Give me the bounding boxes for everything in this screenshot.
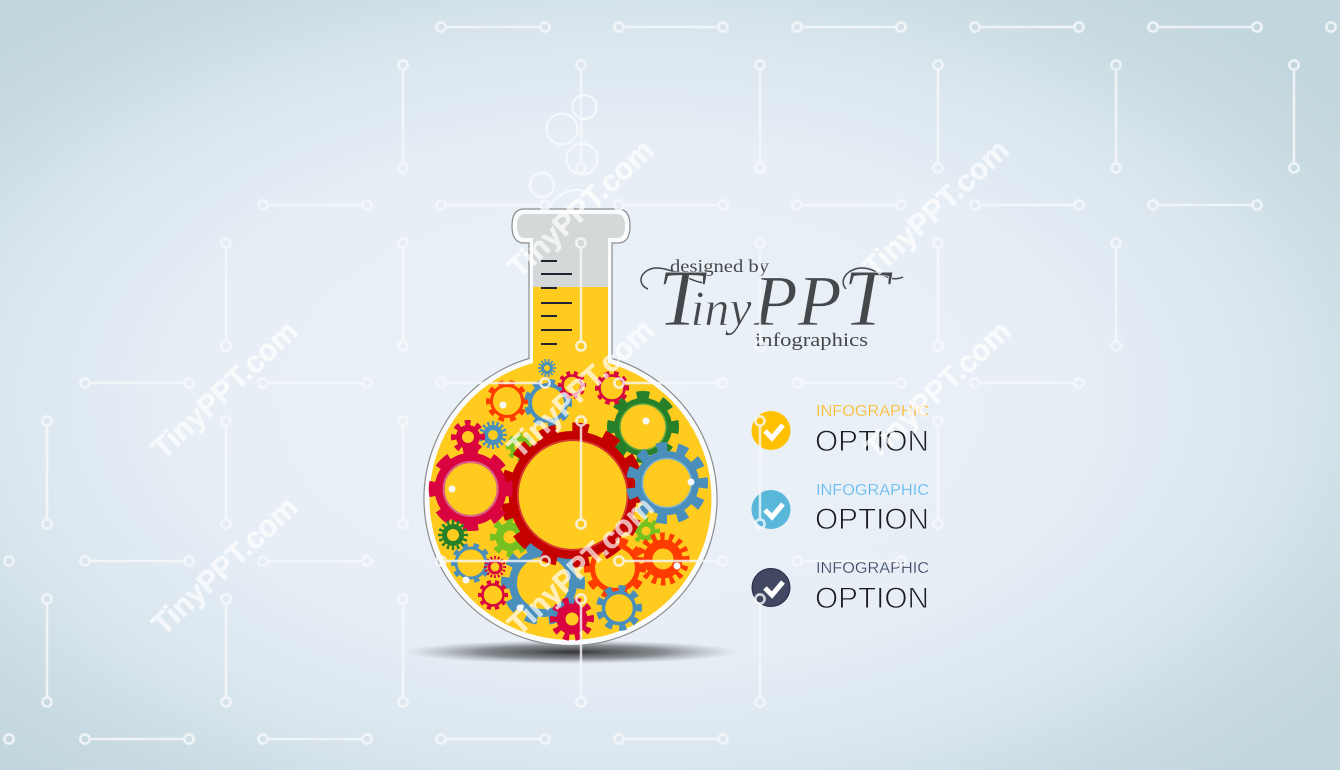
watermarks: TinyPPT.com	[146, 491, 304, 642]
icon: check blue	[752, 490, 790, 529]
logo name: TinyPPT	[658, 255, 894, 343]
watermarks	[146, 134, 1017, 642]
empty neck	[517, 214, 625, 290]
crimson gears	[435, 373, 627, 638]
logo: designed by TinyPPT infographics	[641, 255, 903, 351]
option 2 title: OPTION	[815, 503, 929, 536]
option 3	[752, 560, 929, 615]
flask outline	[424, 209, 717, 645]
blue gears lower and upper	[454, 360, 639, 628]
logo caption bottom: infographics	[755, 330, 868, 351]
flask	[424, 209, 717, 645]
watermarks: TinyPPT.com	[859, 315, 1017, 466]
yellow liquid	[429, 287, 712, 640]
icon: check navy	[752, 568, 790, 606]
big red gear	[508, 430, 638, 560]
option 1 label: INFOGRAPHIC	[816, 403, 929, 420]
option 3 title: OPTION	[815, 582, 929, 615]
watermarks: TinyPPT.com	[502, 491, 660, 642]
option 2 label: INFOGRAPHIC	[816, 482, 929, 499]
watermarks: TinyPPT.com	[857, 134, 1015, 285]
watermarks: TinyPPT.com	[502, 134, 660, 285]
option 1 title: OPTION	[815, 425, 929, 458]
logo swashes	[641, 268, 903, 289]
icon: check yellow	[752, 411, 790, 450]
bubbles	[530, 95, 600, 209]
measure ticks	[541, 261, 572, 344]
gears	[435, 360, 702, 638]
dark green small gear	[440, 522, 466, 548]
option 2	[752, 482, 929, 536]
option 3 label: INFOGRAPHIC	[816, 560, 929, 577]
watermarks: TinyPPT.com	[502, 314, 660, 465]
logo caption top: designed by	[670, 256, 769, 276]
orange gears	[488, 382, 686, 595]
white dots on gears	[448, 402, 694, 612]
watermarks: TinyPPT.com	[146, 315, 304, 466]
option 1	[752, 403, 929, 458]
lime gears	[494, 436, 657, 553]
dark green gear	[612, 396, 674, 458]
blue gear right	[632, 448, 702, 518]
flask shadow	[404, 640, 740, 664]
